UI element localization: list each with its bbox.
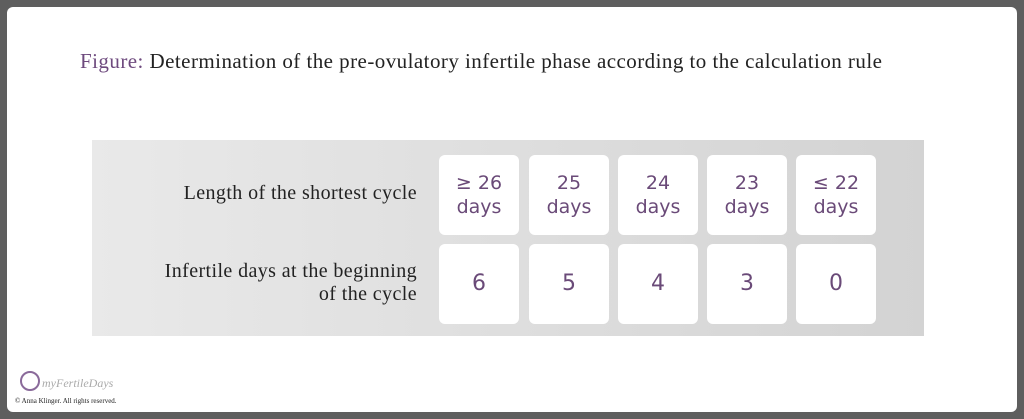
value 5 bbox=[529, 244, 609, 324]
row label: infertile days: of the cycle bbox=[319, 283, 417, 305]
logo: myFertileDays bbox=[42, 376, 114, 390]
box 4: 23 bbox=[735, 172, 759, 194]
title: Figure: Determination of the pre-ovulatory infertile phase according to the calculation rule bbox=[80, 49, 882, 73]
box 3 bbox=[618, 155, 698, 235]
row label: infertile days: Infertile days at the beginning bbox=[165, 260, 417, 282]
box 1 bbox=[439, 155, 519, 235]
value 3 bbox=[707, 244, 787, 324]
value 0: 0 bbox=[829, 271, 843, 296]
logo bbox=[20, 371, 114, 391]
row label: infertile days bbox=[165, 260, 417, 305]
copyright: © Anna Klinger. All rights reserved. bbox=[15, 397, 117, 405]
row label: shortest cycle: Length of the shortest cycle bbox=[184, 182, 417, 204]
value 6 bbox=[439, 244, 519, 324]
box 5 bbox=[796, 155, 876, 235]
value 6: 6 bbox=[472, 271, 486, 296]
box 2: 25 bbox=[557, 172, 581, 194]
value 3: 3 bbox=[740, 271, 754, 296]
box 3: days bbox=[636, 196, 680, 218]
box 2 bbox=[529, 155, 609, 235]
value 5: 5 bbox=[562, 271, 576, 296]
value 4 bbox=[618, 244, 698, 324]
value 4: 4 bbox=[651, 271, 665, 296]
value 0 bbox=[796, 244, 876, 324]
box 3: 24 bbox=[646, 172, 670, 194]
box 5: days bbox=[814, 196, 858, 218]
box 2: days bbox=[547, 196, 591, 218]
box 1: days bbox=[457, 196, 501, 218]
box 4 bbox=[707, 155, 787, 235]
box 5: ≤ 22 bbox=[813, 172, 859, 194]
panel: table bbox=[92, 140, 924, 336]
box 4: days bbox=[725, 196, 769, 218]
box 1: ≥ 26 bbox=[456, 172, 502, 194]
